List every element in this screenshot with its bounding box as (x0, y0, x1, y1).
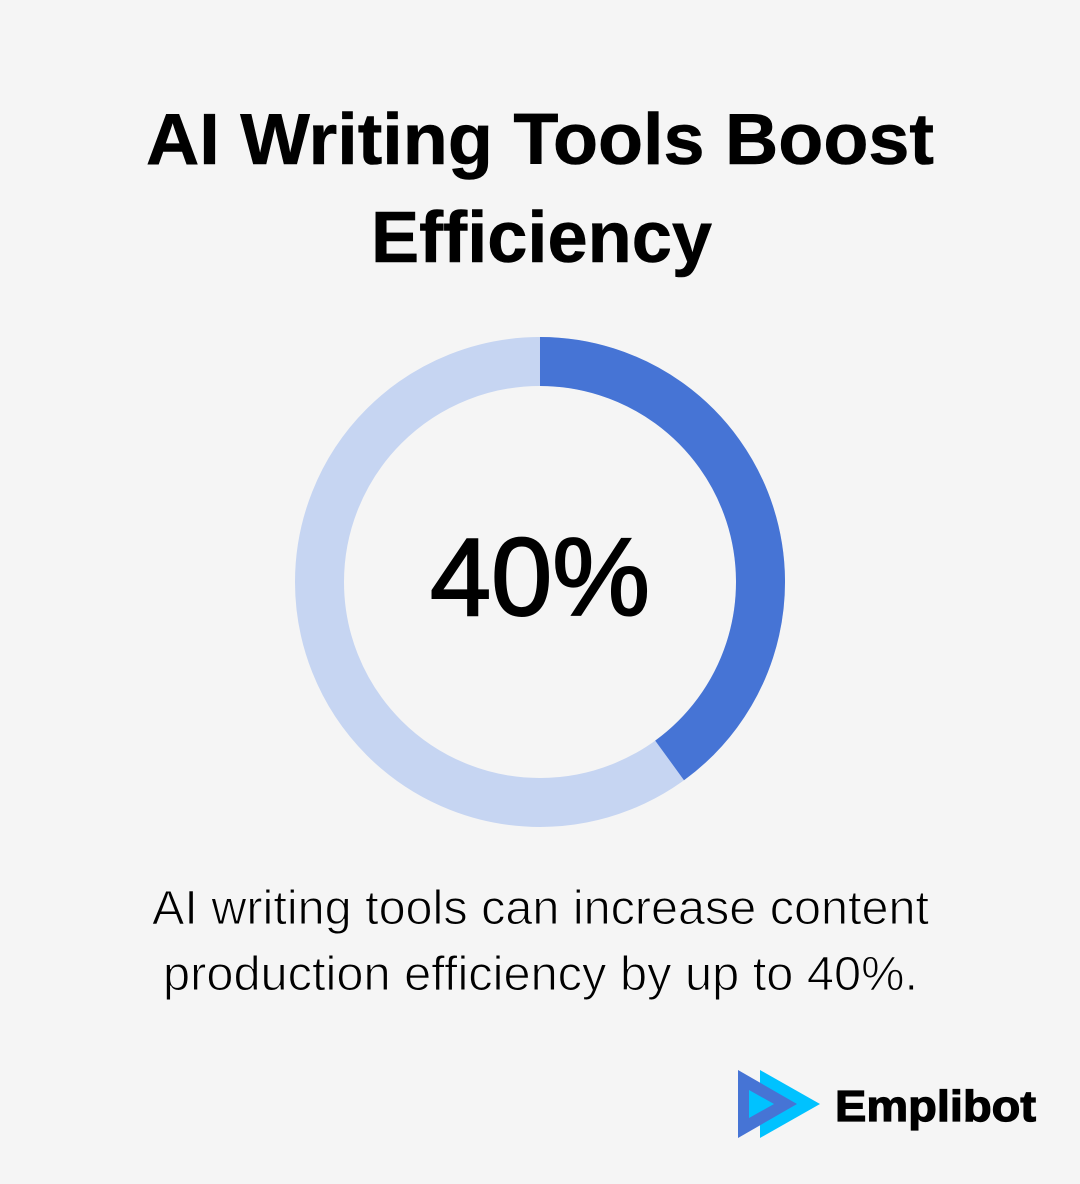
description: AI writing tools can increase content (152, 882, 929, 935)
description: production efficiency by up to 40%. (163, 948, 918, 1001)
wordmark: Emplibot (835, 1082, 1036, 1131)
title: AI Writing Tools Boost (146, 100, 934, 180)
description (152, 882, 929, 1001)
title (146, 100, 934, 278)
title: Efficiency (371, 198, 712, 278)
center value: 40% (430, 516, 650, 639)
logo: Emplibot (738, 1070, 1036, 1138)
donut chart: 40% (320, 362, 761, 802)
icon: play triangles (738, 1070, 820, 1138)
